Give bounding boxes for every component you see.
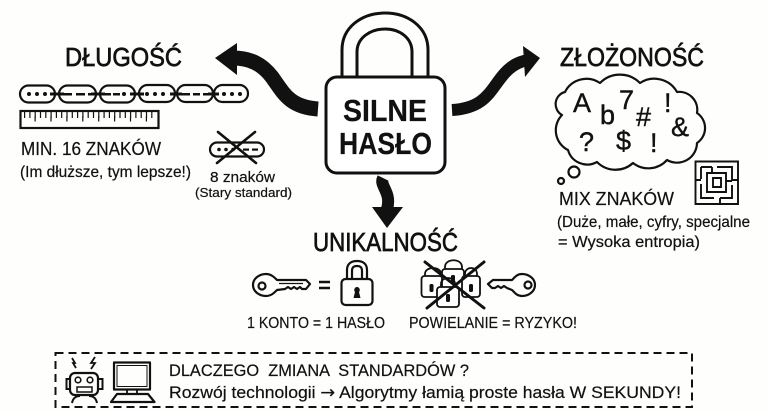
heading: uniqueness: UNIKALNOŚĆ (313, 227, 458, 257)
equals sign (319, 282, 330, 288)
central padlock: strong password: SILNE (343, 93, 427, 128)
text: minimum 16 characters: MIN. 16 ZNAKÓW (21, 138, 161, 159)
panel: why the standard changed (56, 353, 692, 407)
text: high entropy: = Wysoka entropia) (558, 234, 700, 251)
text: one account one password: 1 KONTO = 1 HASŁO (247, 315, 385, 332)
arrow to complexity (452, 46, 540, 110)
text: character classes: (Duże, małe, cyfry, specjalne (557, 214, 750, 231)
icon: thought cloud with characters: ? (579, 127, 594, 157)
icon: single key (253, 274, 310, 296)
icon: reused key (488, 274, 535, 296)
arrow to length (215, 43, 318, 109)
icon: thought cloud with characters: ! (650, 128, 658, 158)
icon: thought cloud with characters: b (600, 100, 615, 130)
icon: robot (66, 357, 102, 403)
section: length (20, 42, 292, 200)
icon: crossed-out short chain (210, 132, 264, 163)
central padlock: strong password: HASŁO (339, 126, 432, 161)
text: panel question: DLACZEGO ZMIANA STANDARDÓW ? (169, 361, 469, 380)
text: mix of characters: MIX ZNAKÓW (559, 188, 674, 209)
text: reuse is a risk: POWIELANIE = RYZYKO! (409, 315, 577, 332)
icon: thought cloud with characters (556, 75, 705, 184)
heading: length: DŁUGOŚĆ (65, 42, 182, 72)
arrow to uniqueness (372, 178, 403, 228)
text: the longer the better: (Im dłuższe, tym lepsze!) (20, 164, 191, 181)
icon: thought cloud with characters: ! (664, 88, 672, 118)
icon: thought cloud with characters: 7 (619, 85, 634, 115)
section: uniqueness (247, 227, 577, 332)
icon: maze (696, 162, 738, 204)
icon: thought cloud with characters: $ (616, 126, 631, 156)
icon: crossed-out padlocks (422, 260, 484, 308)
icon: thought cloud with characters: A (573, 88, 591, 118)
icon: thought cloud with characters: & (671, 112, 689, 142)
text: panel explanation: Rozwój technologii → Algorytmy łamią proste hasła W SEKUNDY! (169, 383, 681, 403)
heading: complexity: ZŁOŻONOŚĆ (560, 42, 704, 72)
section: complexity (556, 42, 750, 251)
text: 8 characters: 8 znaków (210, 169, 275, 186)
icon: thought cloud with characters: # (636, 102, 651, 132)
icon: single padlock (342, 261, 372, 305)
icon: computer (111, 362, 154, 402)
central padlock: strong password (326, 13, 445, 173)
text: old standard: (Stary standard) (195, 185, 292, 200)
icon: long chain (20, 85, 248, 102)
icon: ruler (20, 111, 158, 128)
